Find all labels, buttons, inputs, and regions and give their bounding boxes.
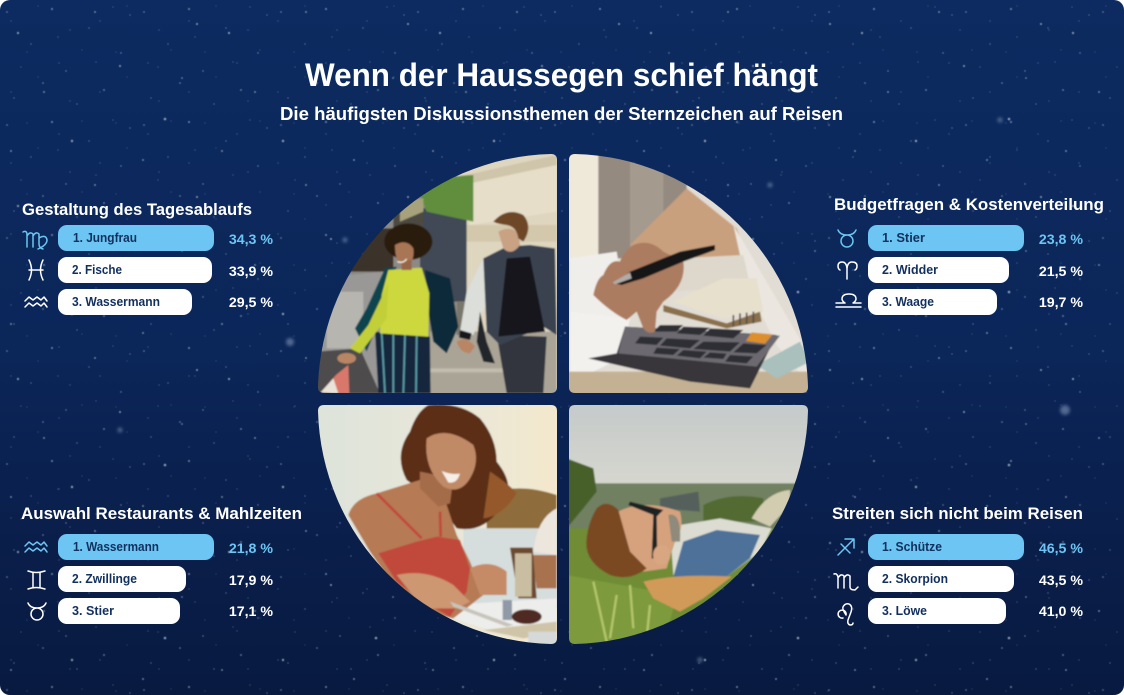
arms xyxy=(470,564,507,595)
desk xyxy=(569,370,808,393)
bar: Zwillinge: 2. Zwillinge xyxy=(72,572,137,586)
value: 17,9 % xyxy=(229,573,273,589)
bar: Stier xyxy=(868,225,1024,251)
bar: Fische: 2. Fische xyxy=(72,263,122,277)
bar: Waage: 3. Waage xyxy=(882,295,934,309)
icon: Skorpion xyxy=(834,574,858,590)
icon: Fische xyxy=(29,260,43,280)
value: 41,0 % xyxy=(1039,604,1083,620)
value: 29,5 % xyxy=(229,295,273,311)
value: 23,8 % xyxy=(1039,232,1083,248)
value: 34,3 % xyxy=(229,232,273,248)
icon: Zwillinge xyxy=(28,571,45,589)
icon: Waage xyxy=(836,294,861,307)
panel: Streiten sich nicht beim Reisen xyxy=(832,504,1083,625)
panel: bottom-left photo, woman at dinner xyxy=(313,402,560,648)
calculator xyxy=(588,327,777,388)
value: 46,5 % xyxy=(1039,541,1083,557)
bar: Widder xyxy=(868,257,1009,283)
man xyxy=(497,335,547,393)
plate and cutlery xyxy=(453,598,557,637)
value: 21,5 % xyxy=(1039,264,1083,280)
woman torso xyxy=(348,480,483,618)
subtitle: Die häufigsten Diskussionsthemen der Sternzeichen auf Reisen xyxy=(280,104,843,124)
icon: Widder xyxy=(838,262,857,279)
heading: Streiten sich nicht beim Reisen xyxy=(832,504,1083,523)
heading: Gestaltung des Tagesablaufs xyxy=(22,200,252,219)
bar: Waage xyxy=(868,289,997,315)
bar: Stier xyxy=(58,598,180,624)
bar: Jungfrau: 1. Jungfrau xyxy=(73,231,137,245)
hand xyxy=(593,243,684,333)
bar: Stier: 1. Stier xyxy=(882,231,925,245)
hair back xyxy=(401,404,508,529)
bar: Löwe xyxy=(868,598,1006,624)
icon: Wassermann xyxy=(25,542,47,552)
heading: Auswahl Restaurants & Mahlzeiten xyxy=(21,504,302,523)
bar: Wassermann xyxy=(58,534,214,560)
icon: Stier xyxy=(28,603,46,620)
icon: Wassermann xyxy=(25,297,47,307)
panel: top-right photo, hand on calculator xyxy=(567,152,817,398)
panel: bottom-right photo, man lying in grass xyxy=(567,402,813,648)
value: 19,7 % xyxy=(1039,295,1083,311)
bar: Wassermann: 1. Wassermann xyxy=(73,540,159,554)
panel: Auswahl Restaurants & Mahlzeiten xyxy=(21,504,302,624)
bar: Schütze: 1. Schütze xyxy=(882,540,942,554)
heading: Budgetfragen & Kostenverteilung xyxy=(834,195,1104,214)
value: 17,1 % xyxy=(229,604,273,620)
icon: Jungfrau xyxy=(23,231,47,249)
bar: Widder: 2. Widder xyxy=(882,263,938,277)
value: 33,9 % xyxy=(229,264,273,280)
bar: Fische xyxy=(58,257,212,283)
value: 21,8 % xyxy=(229,541,273,557)
bar: Stier: 3. Stier xyxy=(72,604,114,618)
bar: Wassermann: 3. Wassermann xyxy=(72,295,160,309)
bar: Wassermann xyxy=(58,289,192,315)
title: Wenn der Haussegen schief hängt xyxy=(305,57,818,93)
person on right xyxy=(533,508,557,555)
value: 43,5 % xyxy=(1039,573,1083,589)
bar: Skorpion xyxy=(868,566,1014,592)
icon: Stier xyxy=(838,230,856,247)
icon: Schütze xyxy=(838,539,854,555)
bar: Skorpion: 2. Skorpion xyxy=(882,572,948,586)
bar: Löwe: 3. Löwe xyxy=(882,604,927,618)
trousers xyxy=(375,332,431,393)
panel: top-left photo, couple walking xyxy=(318,154,557,393)
icon: Löwe xyxy=(838,604,853,625)
bar: Zwillinge xyxy=(58,566,186,592)
panel: Gestaltung des Tagesablaufs xyxy=(22,200,273,315)
bar: Jungfrau xyxy=(58,225,214,251)
bar: Schütze xyxy=(868,534,1024,560)
neck and face xyxy=(420,472,453,507)
panel: Budgetfragen & Kostenverteilung xyxy=(834,195,1104,315)
